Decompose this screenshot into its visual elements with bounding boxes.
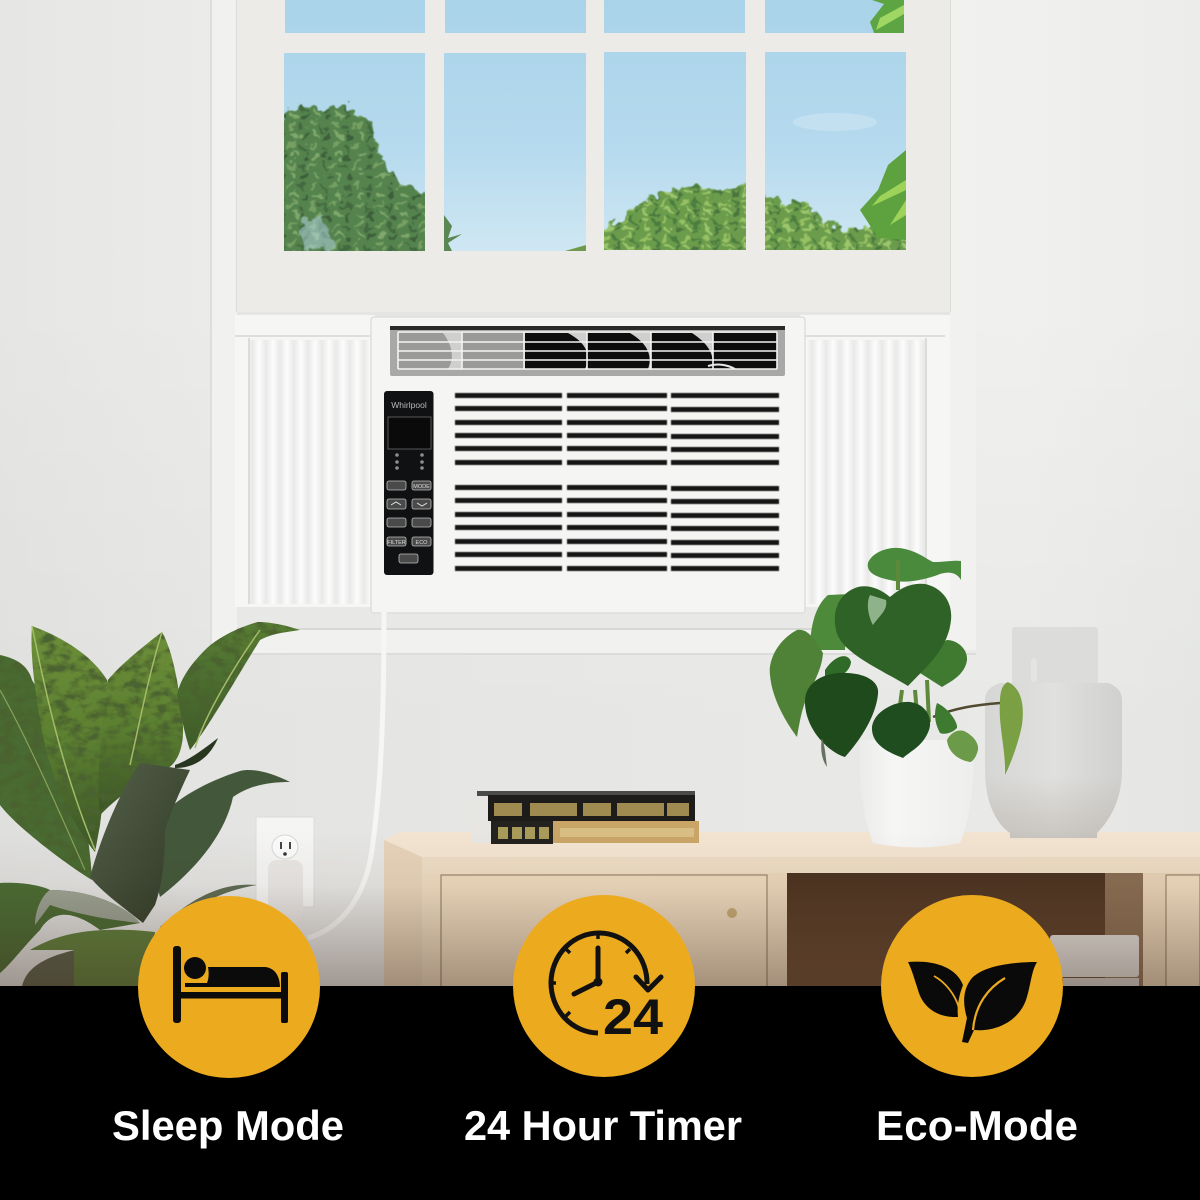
large leafy plant on left <box>0 622 300 986</box>
potted plant leaves <box>770 548 1023 775</box>
white ceramic vase <box>985 627 1122 838</box>
icon circle: eco <box>881 895 1063 1077</box>
window frame and panes <box>210 0 976 650</box>
control panel: ECO <box>416 540 428 546</box>
top air vent <box>390 326 785 376</box>
power cord <box>308 612 384 938</box>
potted plant: white pot <box>860 740 973 848</box>
trees seen through window <box>280 0 910 256</box>
air conditioner unit <box>371 317 805 613</box>
control panel: FILTER <box>387 540 406 546</box>
drawer <box>441 875 767 990</box>
feature: eco mode <box>876 895 1078 1149</box>
label: timer: 24 Hour Timer <box>464 1102 742 1149</box>
icon circle: sleep mode <box>138 896 320 1078</box>
wall outlet with plug <box>256 817 314 922</box>
control panel <box>384 391 434 575</box>
black footer band <box>0 986 1200 1200</box>
bottom shadow gradient <box>0 830 1200 987</box>
control panel: Whirlpool <box>391 400 427 410</box>
control panel: MODE <box>413 484 430 490</box>
icon: clock with arrow and 24 <box>550 933 663 1045</box>
open shelf niche <box>787 873 1143 990</box>
stacked books <box>472 791 699 844</box>
icon: leaves <box>908 962 1037 1043</box>
sideboard <box>384 832 1200 990</box>
left accordion side panel <box>235 315 375 607</box>
feature: 24 hour timer <box>464 895 742 1149</box>
window sill and lower frame <box>210 312 976 655</box>
feature: sleep mode <box>112 896 344 1149</box>
icon circle: timer <box>513 895 695 1077</box>
icon: bed with sleeper <box>173 946 288 1023</box>
right accordion side panel <box>800 315 950 607</box>
icon: clock with arrow and 24: 24 <box>603 989 663 1045</box>
AC body <box>371 317 805 613</box>
label: sleep mode: Sleep Mode <box>112 1102 344 1149</box>
front louvers <box>455 393 779 571</box>
label: eco mode: Eco-Mode <box>876 1102 1078 1149</box>
